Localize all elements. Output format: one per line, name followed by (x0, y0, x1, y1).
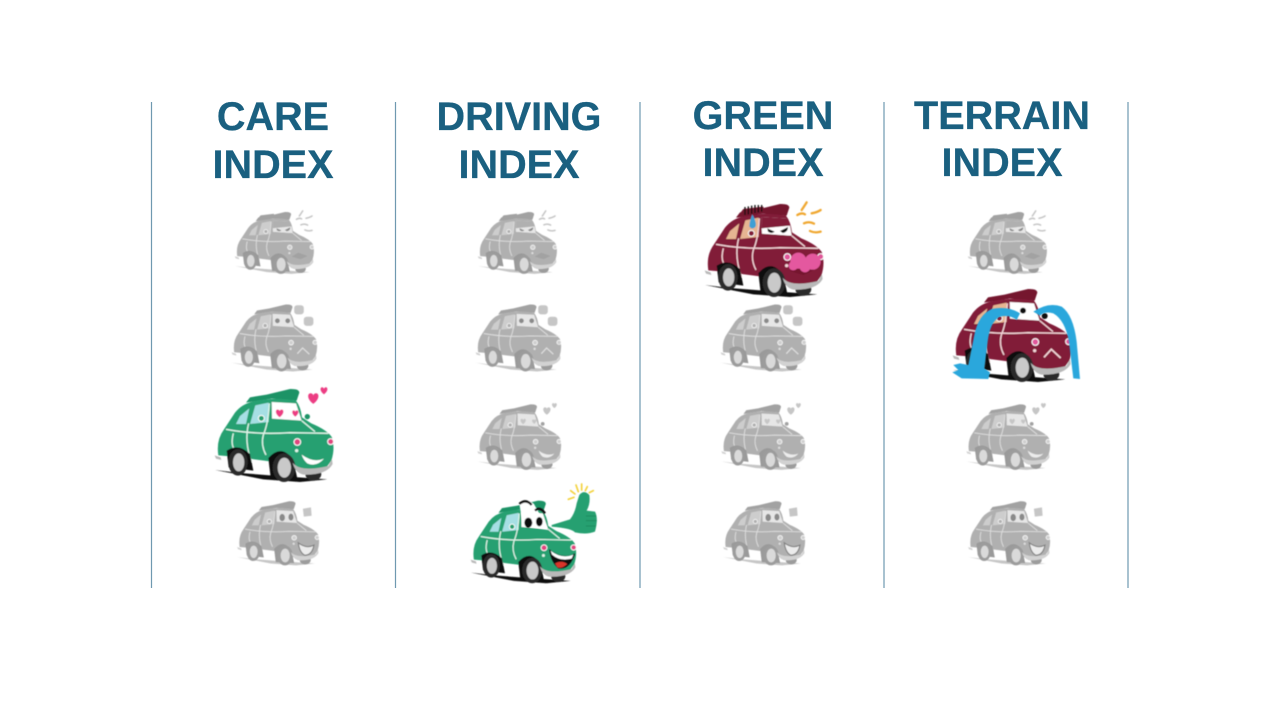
heading: care index: INDEX (213, 143, 334, 187)
heading: care index: CARE (217, 95, 329, 139)
icon: gray fuming car (235, 211, 314, 274)
icon: gray heart-eyed car (966, 403, 1050, 470)
heading: green index: GREEN (693, 94, 833, 138)
icon: gray smiling car (723, 501, 805, 565)
panel: driving index (437, 95, 601, 583)
icon: gray crying car (721, 304, 806, 371)
heading: driving index: DRIVING (437, 95, 601, 139)
icon: gray fuming car (968, 211, 1047, 274)
icon: gray heart-eyed car (721, 403, 805, 470)
icon: gray crying car (232, 304, 317, 371)
icon: red fuming car with sweat drop (705, 202, 824, 297)
icon: gray fuming car (478, 211, 557, 274)
heading: green index: INDEX (703, 141, 824, 185)
heading: driving index: INDEX (459, 143, 580, 187)
icon: gray crying car (476, 304, 561, 371)
icon: green car with heart eyes (215, 387, 334, 482)
heading: terrain index: INDEX (942, 141, 1063, 185)
heading: terrain index: TERRAIN (914, 94, 1090, 138)
panel: terrain index (914, 94, 1090, 565)
panel: green index (693, 94, 833, 565)
column divider lines (152, 102, 1128, 588)
icon: gray smiling car (968, 501, 1050, 565)
icon: gray heart-eyed car (477, 403, 561, 470)
panel: care index (213, 95, 334, 565)
icon: gray smiling car (237, 501, 319, 565)
icon: red car crying streams of tears (952, 289, 1080, 382)
icon: green car giving a thumbs up (471, 484, 597, 583)
